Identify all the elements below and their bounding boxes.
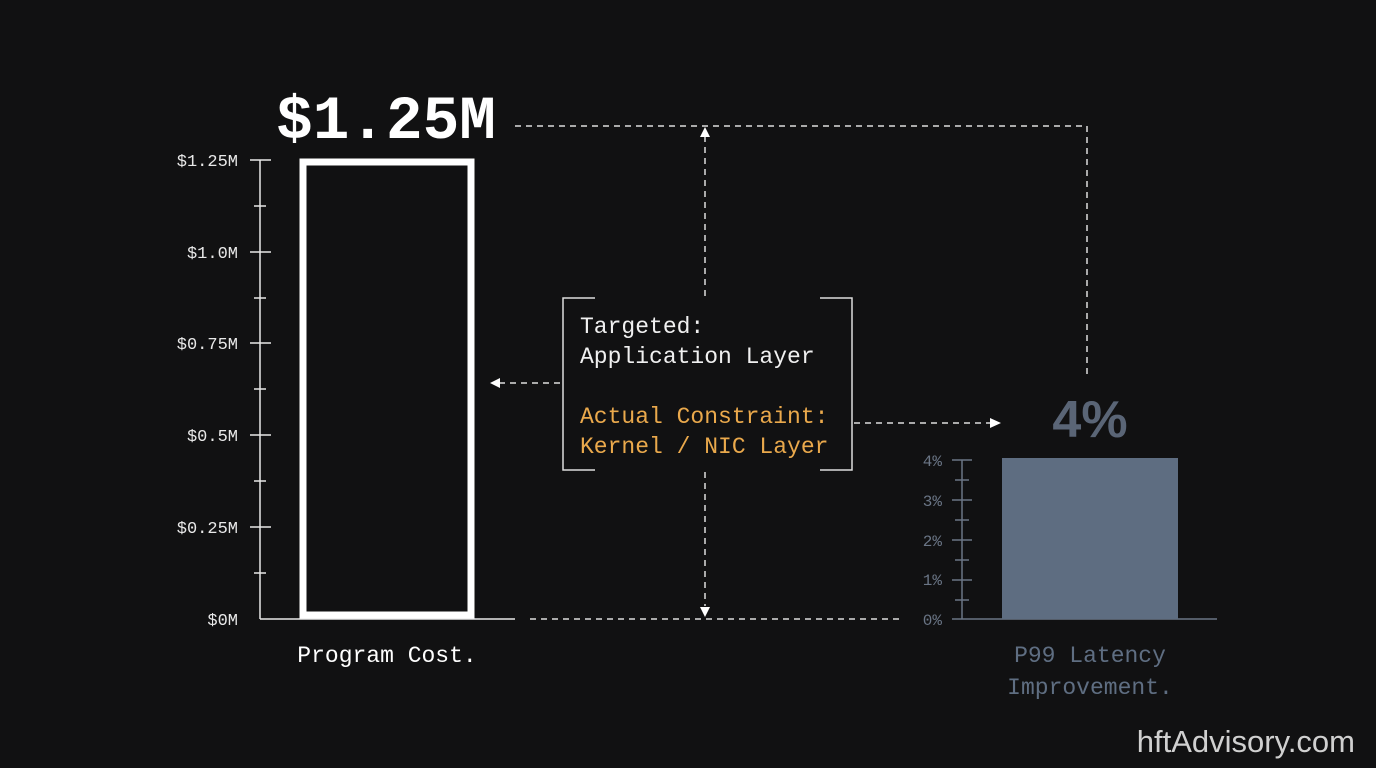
dashed connectors xyxy=(500,126,1087,619)
left axis: program cost: $1.0M xyxy=(187,245,238,264)
callout bracket box: Kernel / NIC Layer xyxy=(580,434,828,460)
arrowheads xyxy=(490,127,1001,617)
right axis: latency: 1% xyxy=(923,572,942,590)
right axis: latency: 4% xyxy=(923,453,942,471)
callout bracket box: Actual Constraint: xyxy=(580,404,828,430)
label: program cost: Program Cost. xyxy=(297,643,477,669)
watermark: hftAdvisory.com xyxy=(1137,724,1355,759)
left axis: program cost: $0.5M xyxy=(187,428,238,447)
right axis: latency: 2% xyxy=(923,533,942,551)
bar: latency improvement xyxy=(1002,458,1178,619)
big value 4%: 4% xyxy=(1052,391,1128,449)
big value $1.25M: $1.25M xyxy=(276,88,496,157)
callout bracket box: Targeted: xyxy=(580,314,704,340)
callout bracket box xyxy=(563,298,852,470)
left axis: program cost: $1.25M xyxy=(177,153,238,172)
right axis: latency: 0% xyxy=(923,612,942,630)
left axis: program cost: $0.75M xyxy=(177,336,238,355)
label: P99 latency improvement: Improvement. xyxy=(1007,675,1173,701)
left axis: program cost: $0.25M xyxy=(177,520,238,539)
right axis: latency xyxy=(923,453,1217,630)
right axis: latency: 3% xyxy=(923,493,942,511)
left axis: program cost xyxy=(177,153,515,631)
bar: program cost outline xyxy=(303,162,471,615)
left axis: program cost: $0M xyxy=(207,612,238,631)
label: P99 latency improvement: P99 Latency xyxy=(1014,643,1166,669)
callout bracket box: Application Layer xyxy=(580,344,815,370)
